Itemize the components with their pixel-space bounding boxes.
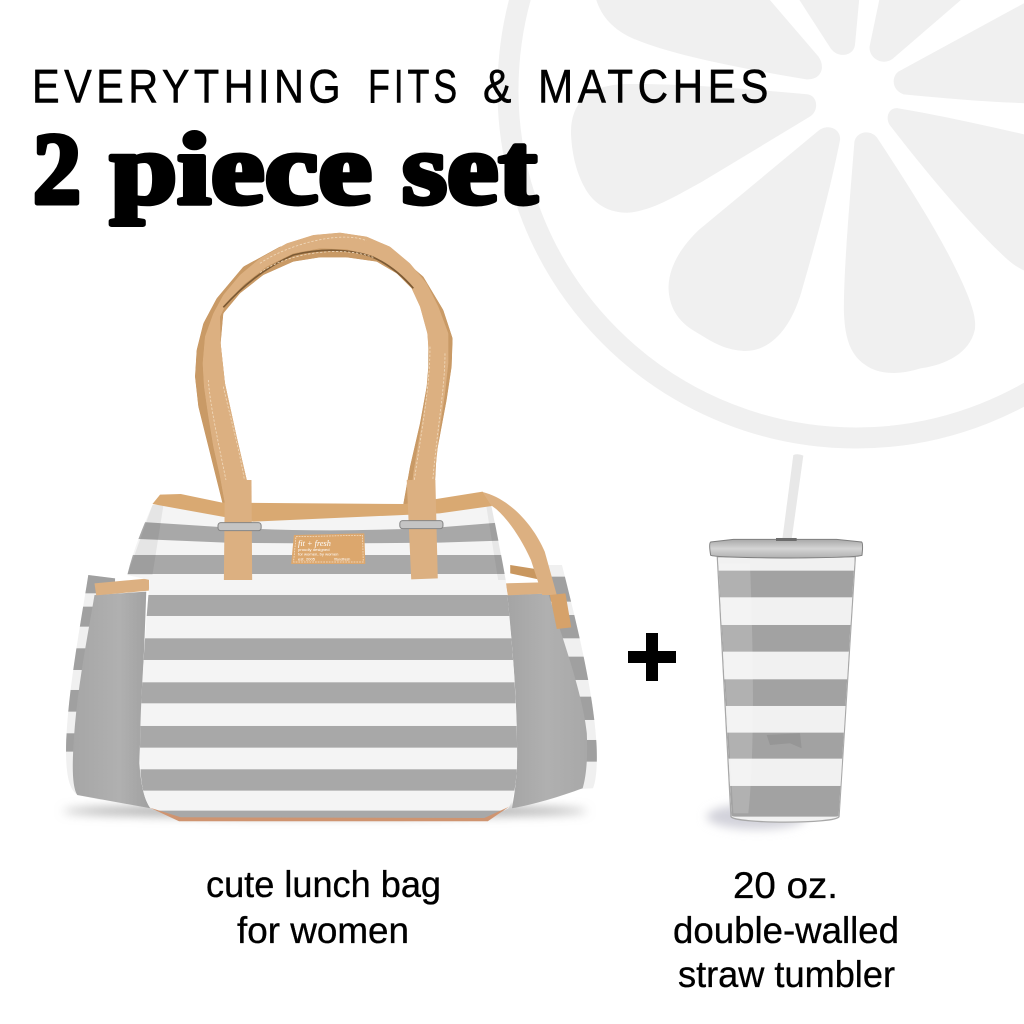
brand patch: fitandfresh — [334, 557, 350, 561]
heading: 2 piece set: 2 — [33, 113, 81, 226]
background citrus slice watermark — [508, 0, 1024, 438]
caption: lunch bag: for women — [237, 909, 409, 951]
caption: lunch bag: cute lunch bag — [206, 863, 441, 905]
brand patch: proudly designed — [298, 547, 330, 552]
citrus segments — [571, 0, 1024, 373]
caption: tumbler: double-walled — [673, 909, 899, 951]
heading: everything fits and matches: MATCHES — [538, 60, 773, 112]
right pocket back trim — [510, 565, 541, 580]
brand patch — [291, 533, 365, 564]
lid — [710, 538, 863, 558]
heading: 2 piece set: set — [402, 113, 537, 226]
right side gusset stripes — [548, 565, 597, 789]
top tan binding — [152, 492, 492, 522]
back panel shading — [127, 505, 164, 575]
brand patch: est. 2005 — [298, 556, 316, 561]
left pocket tan trim — [94, 578, 149, 595]
lunch bag — [60, 233, 602, 823]
heading: everything fits and matches — [32, 60, 773, 112]
caption: tumbler — [673, 864, 899, 995]
straw — [782, 454, 803, 539]
caption: tumbler: straw tumbler — [678, 953, 895, 995]
handle rings — [218, 521, 443, 531]
caption: lunch bag — [206, 863, 441, 951]
caption: tumbler: 20 oz. — [733, 864, 838, 906]
citrus rind ring — [508, 0, 1024, 438]
side strap with tab — [483, 492, 571, 629]
plus sign — [628, 633, 676, 681]
right handle tab — [407, 480, 438, 579]
bag base trim — [150, 807, 509, 821]
tumbler shadow — [707, 804, 807, 829]
bag handles — [195, 233, 453, 513]
brand patch: fit + fresh — [298, 539, 331, 548]
heading: everything fits and matches: FITS — [368, 60, 461, 112]
tumbler — [707, 454, 863, 829]
heading: 2 piece set: piece — [110, 113, 372, 226]
striped front panel — [122, 503, 522, 823]
left mesh pocket — [73, 592, 150, 808]
right pocket tan trim — [506, 582, 550, 595]
left side gusset stripes — [66, 575, 116, 800]
cup body with stripes — [713, 557, 860, 823]
left handle tab — [224, 480, 252, 580]
heading: everything fits and matches: EVERYTHING — [32, 60, 345, 112]
bag ground shadow — [63, 805, 587, 817]
brand patch: for women, by women — [298, 551, 338, 556]
right mesh pocket — [507, 593, 587, 808]
heading: 2 piece set — [33, 113, 537, 226]
cup highlight — [718, 563, 753, 813]
heading: everything fits and matches: & — [483, 60, 516, 112]
